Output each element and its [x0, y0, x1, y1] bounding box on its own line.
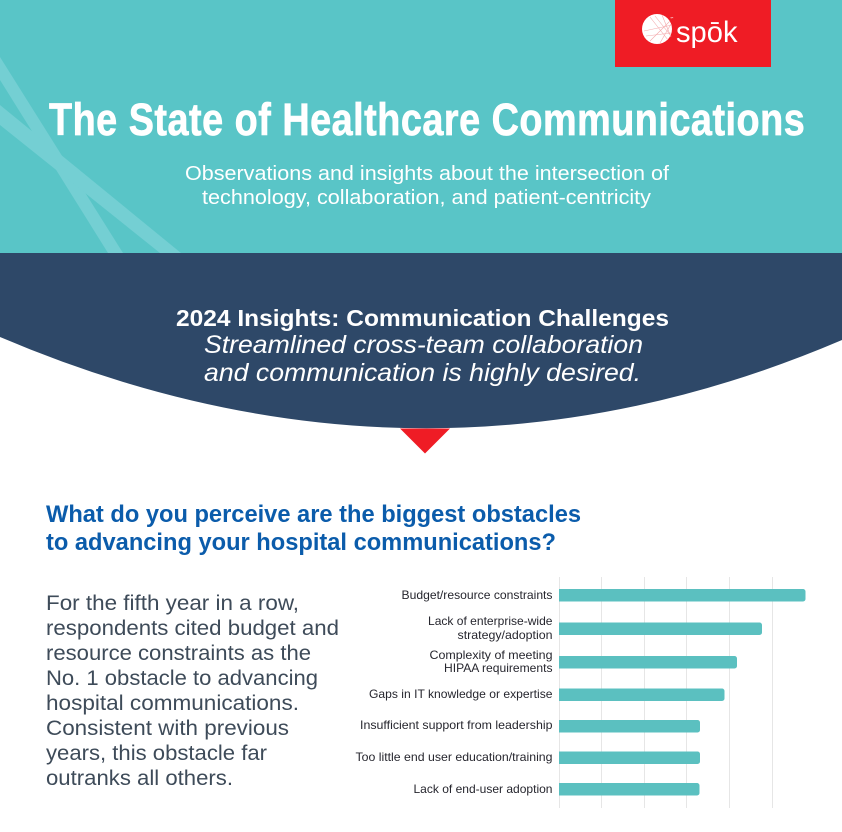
bar labels: Lack of end-user adoption	[414, 782, 552, 796]
header band	[0, 0, 842, 254]
body text: No. 1 obstacle to advancing	[46, 667, 318, 690]
logo: Spok	[615, 0, 771, 67]
body text	[46, 592, 339, 790]
question heading: to advancing your hospital communications?	[46, 529, 556, 556]
bar labels: HIPAA requirements	[444, 661, 552, 675]
bar labels: Gaps in IT knowledge or expertise	[369, 687, 553, 701]
banner italic statement: Streamlined cross-team collaboration	[204, 331, 643, 359]
banner italic statement	[204, 331, 643, 387]
navy curved banner	[0, 253, 842, 428]
body text: For the fifth year in a row,	[46, 592, 299, 615]
body text: respondents cited budget and	[46, 617, 339, 640]
question heading	[46, 501, 581, 556]
logo: Spok: spōk	[676, 16, 738, 49]
bar labels: Lack of enterprise-wide	[428, 614, 553, 628]
bar labels: Insufficient support from leadership	[360, 718, 553, 732]
question heading: What do you perceive are the biggest obstacles	[46, 501, 581, 528]
title: The State of Healthcare Communications	[49, 94, 805, 145]
banner heading: 2024 Insights: Communication Challenges	[176, 305, 669, 331]
bar chart	[356, 577, 806, 808]
bar labels: Too little end user education/training	[356, 750, 552, 764]
bars	[559, 589, 806, 796]
body text: resource constraints as the	[46, 642, 311, 665]
red pointer triangle	[400, 428, 450, 454]
bar labels: strategy/adoption	[458, 628, 552, 642]
bar labels: Budget/resource constraints	[402, 588, 552, 602]
body text: Consistent with previous	[46, 717, 289, 740]
bar labels	[356, 588, 553, 796]
banner italic statement: and communication is highly desired.	[204, 359, 641, 387]
body text: years, this obstacle far	[46, 742, 267, 765]
bar labels: Complexity of meeting	[430, 648, 552, 662]
body text: outranks all others.	[46, 767, 233, 790]
subtitle: technology, collaboration, and patient-centricity	[202, 187, 651, 209]
body text: hospital communications.	[46, 692, 299, 715]
subtitle: Observations and insights about the intersection of	[185, 163, 669, 185]
subtitle	[185, 163, 669, 209]
logo: Spok: ℠	[670, 16, 674, 21]
